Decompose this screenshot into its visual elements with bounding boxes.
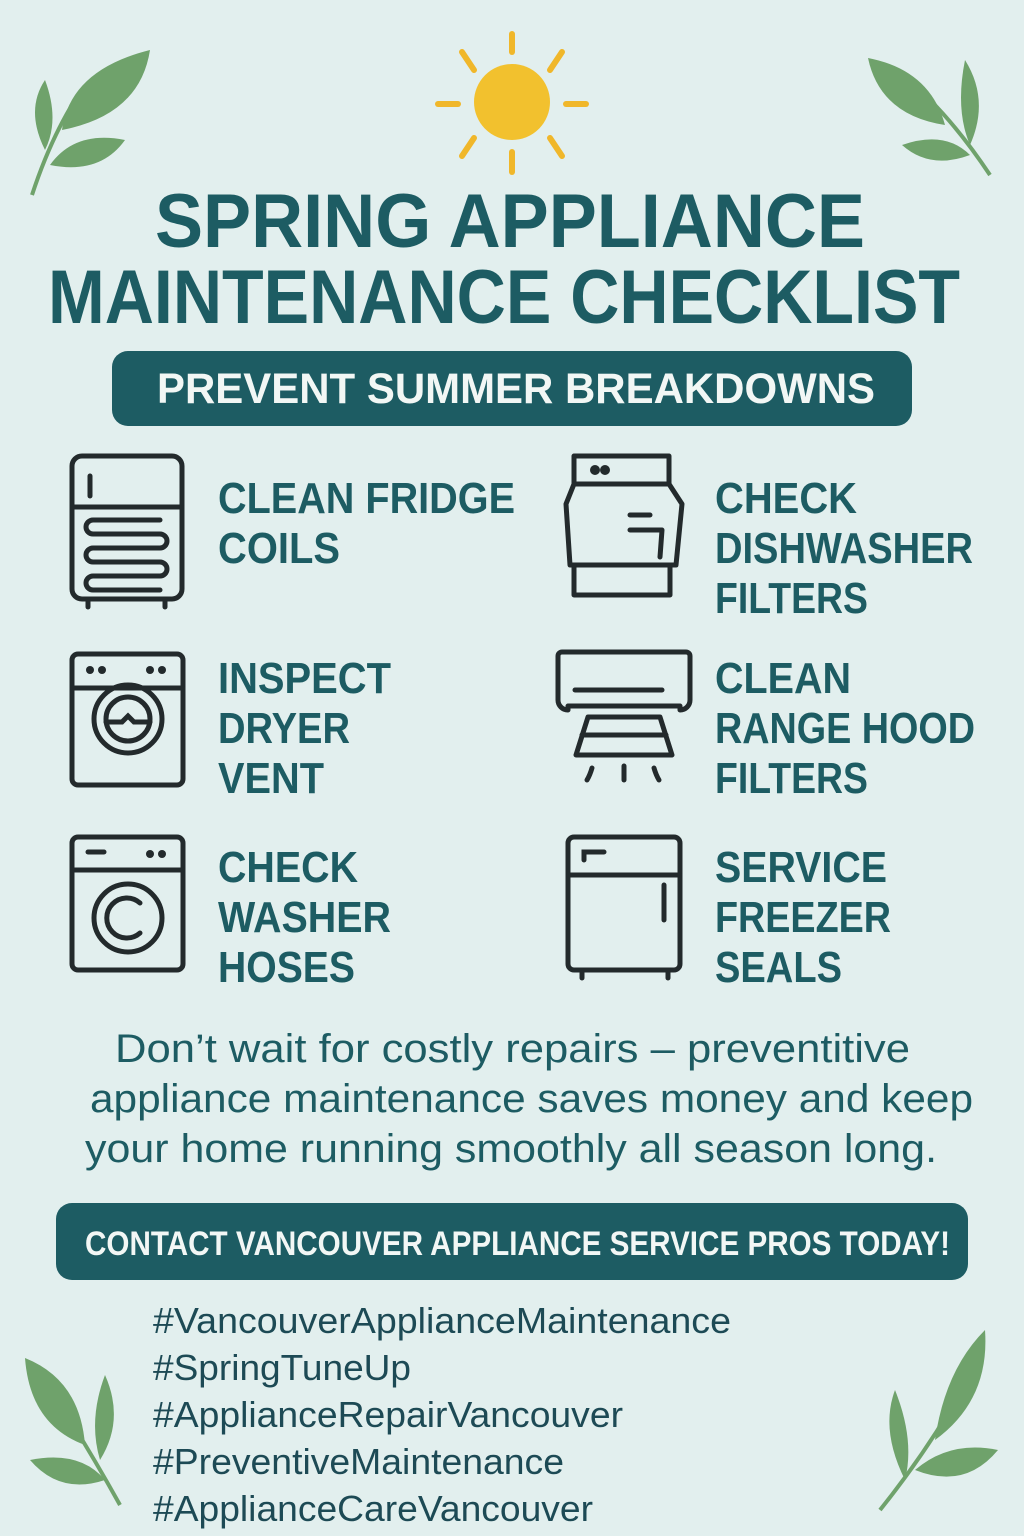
label — [218, 654, 391, 803]
label — [715, 843, 891, 992]
icon: leaves bottom left — [25, 1358, 120, 1505]
label: FILTERS — [715, 574, 868, 623]
label: CLEAN FRIDGE — [218, 474, 515, 523]
label — [218, 474, 515, 573]
subtitle banner: PREVENT SUMMER BREAKDOWNS — [157, 365, 875, 413]
hashtags: #SpringTuneUp — [153, 1347, 411, 1388]
icon: fridge — [72, 456, 182, 607]
label: COILS — [218, 524, 340, 573]
item: check washer hoses — [72, 837, 391, 992]
item: clean range hood filters — [558, 652, 975, 803]
item: service freezer seals — [568, 837, 891, 992]
hashtags: #PreventiveMaintenance — [153, 1441, 564, 1482]
hashtags: #ApplianceRepairVancouver — [153, 1394, 623, 1435]
label: FREEZER — [715, 893, 891, 942]
label: FILTERS — [715, 754, 868, 803]
body text: your home running smoothly all season long. — [85, 1127, 937, 1171]
label: HOSES — [218, 943, 355, 992]
label: CHECK — [715, 474, 857, 523]
label: SEALS — [715, 943, 842, 992]
title: SPRING APPLIANCE — [155, 179, 865, 264]
icon: range hood — [558, 652, 690, 780]
icon: leaves top right — [868, 58, 990, 175]
icon: freezer — [568, 837, 680, 978]
label: INSPECT — [218, 654, 391, 703]
icon: washer — [72, 837, 183, 970]
icon: dishwasher — [566, 456, 682, 595]
item: clean fridge coils — [72, 456, 515, 607]
label: DRYER — [218, 704, 350, 753]
label — [715, 654, 975, 803]
icon: sun — [438, 34, 586, 172]
label: SERVICE — [715, 843, 887, 892]
icon: dryer — [72, 654, 183, 785]
body text: appliance maintenance saves money and keep — [90, 1077, 973, 1121]
icon: leaves top left — [32, 50, 150, 195]
label: CHECK — [218, 843, 358, 892]
body text — [85, 1027, 973, 1171]
label: CLEAN — [715, 654, 851, 703]
hashtags: #VancouverApplianceMaintenance — [153, 1300, 731, 1341]
item: check dishwasher filters — [566, 456, 973, 623]
hashtags — [153, 1300, 731, 1529]
icon: leaves bottom right — [880, 1330, 998, 1510]
label: VENT — [218, 754, 324, 803]
hashtags: #ApplianceCareVancouver — [153, 1488, 593, 1529]
label: WASHER — [218, 893, 391, 942]
CTA banner — [56, 1203, 968, 1280]
title — [48, 179, 960, 340]
item: inspect dryer vent — [72, 654, 391, 803]
label — [218, 843, 391, 992]
label: RANGE HOOD — [715, 704, 975, 753]
label — [715, 474, 973, 623]
label: DISHWASHER — [715, 524, 973, 573]
subtitle banner — [112, 351, 912, 426]
body text: Don’t wait for costly repairs – preventitive — [115, 1027, 910, 1071]
